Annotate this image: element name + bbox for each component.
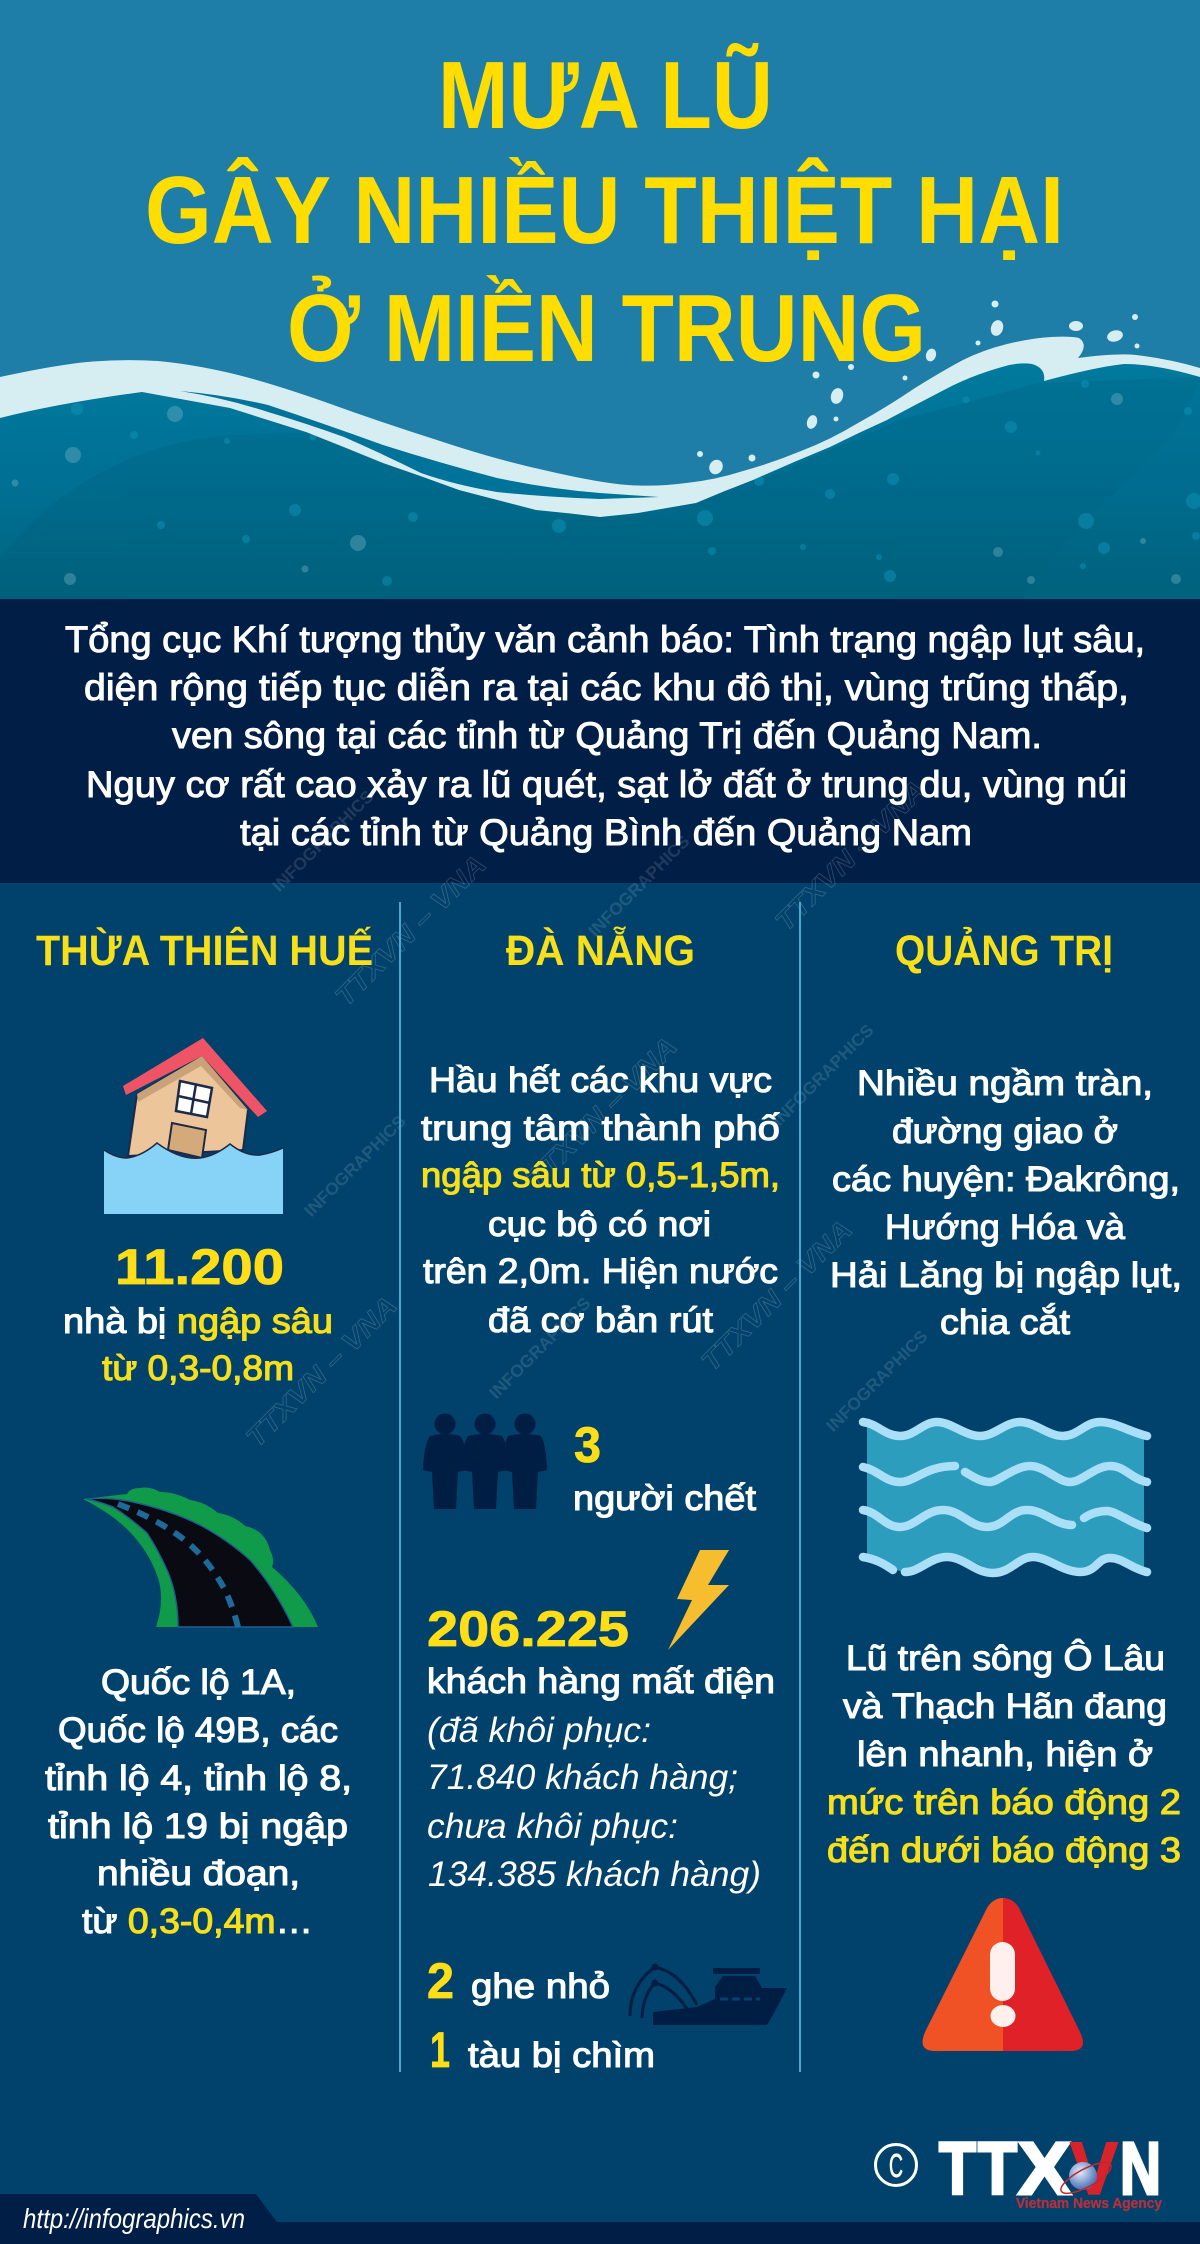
- copyright mark: [876, 2144, 916, 2186]
- panel: main background: [0, 883, 1200, 2244]
- title: Ở MIỀN TRUNG: [287, 274, 926, 382]
- stat: 3 deaths: 3: [574, 1417, 601, 1473]
- intro text: tại các tỉnh từ Quảng Bình đến Quảng Nam: [240, 812, 972, 853]
- watermarks: INFOGRAPHICS: [769, 1021, 878, 1130]
- spray droplets: [697, 300, 1140, 477]
- intro text: Tổng cục Khí tượng thủy văn cảnh báo: Tình trạng ngập lụt sâu,: [65, 619, 1145, 660]
- Quang Tri description: Nhiều ngầm tràn,: [857, 1064, 1153, 1103]
- heading: Quảng Trị: QUẢNG TRỊ: [895, 926, 1113, 975]
- stat: 11.200 houses: 11.200: [115, 1239, 284, 1295]
- river flood text: và Thạch Hãn đang: [843, 1687, 1167, 1726]
- stat: power outage: (đã khôi phục:: [427, 1711, 651, 1750]
- river flood text: đến dưới báo động 3: [827, 1831, 1181, 1870]
- watermarks: INFOGRAPHICS: [585, 832, 694, 941]
- watermarks: TTXVN – VNA: [240, 1290, 403, 1453]
- panel: Thừa Thiên Huế: [36, 926, 373, 1941]
- watermarks: INFOGRAPHICS: [823, 1327, 932, 1436]
- Da Nang description: cục bộ có nơi: [488, 1205, 711, 1244]
- logo: TTXVN: V: [1070, 2127, 1118, 2210]
- stat: 11.200 houses: nhà bị ngập sâu: [63, 1302, 333, 1341]
- icon: three people: [423, 1414, 547, 1509]
- stat: 11.200 houses: [63, 1239, 333, 1388]
- roads text: Quốc lộ 49B, các: [58, 1711, 338, 1750]
- watermarks: INFOGRAPHICS: [486, 1294, 595, 1403]
- river flood text: lên nhanh, hiện ở: [857, 1735, 1153, 1774]
- title: MƯA LŨ: [438, 42, 773, 149]
- Da Nang description: trên 2,0m. Hiện nước: [423, 1252, 778, 1291]
- roads text: tỉnh lộ 4, tỉnh lộ 8,: [45, 1759, 352, 1798]
- heading: Thừa Thiên Huế: THỪA THIÊN HUẾ: [36, 926, 373, 975]
- copyright mark: C: [889, 2147, 903, 2184]
- roads text: Quốc lộ 1A,: [101, 1663, 296, 1702]
- stat: 11.200 houses: từ 0,3-0,8m: [102, 1349, 294, 1388]
- stat: power outage: khách hàng mất điện: [427, 1662, 775, 1701]
- logo: TTXVN: T: [939, 2127, 976, 2210]
- intro text: ven sông tại các tỉnh từ Quảng Trị đến Quảng Nam.: [172, 715, 1042, 756]
- sea body: [0, 337, 1200, 600]
- panel: Quảng Trị: [827, 926, 1182, 2051]
- intro text: [65, 619, 1145, 853]
- stat: power outage: [427, 1601, 775, 1894]
- stat: boats sunk: ghe nhỏ: [471, 1967, 610, 2006]
- river flood text: mức trên báo động 2: [827, 1783, 1181, 1822]
- icon: flooded house: [104, 1038, 283, 1214]
- river flood text: [827, 1639, 1181, 1870]
- stat: power outage: chưa khôi phục:: [427, 1807, 678, 1846]
- Da Nang description: [421, 1061, 780, 1340]
- heading: Đà Nẵng: ĐÀ NẴNG: [506, 927, 695, 975]
- logo: TTXVN: Vietnam News Agency: [1016, 2195, 1163, 2212]
- Quang Tri description: Hải Lăng bị ngập lụt,: [830, 1256, 1182, 1295]
- foam inner slit: [180, 391, 659, 499]
- Da Nang description: Hầu hết các khu vực: [429, 1061, 772, 1100]
- icon: warning triangle: [923, 1898, 1083, 2051]
- Da Nang description: đã cơ bản rút: [488, 1301, 713, 1340]
- footer tab: [0, 2194, 277, 2244]
- stat: 3 deaths: người chết: [573, 1479, 756, 1518]
- stat: boats sunk: [427, 1953, 655, 2078]
- intro text: diện rộng tiếp tục diễn ra tại các khu đô thị, vùng trũng thấp,: [84, 667, 1129, 708]
- Quang Tri description: Hướng Hóa và: [885, 1208, 1126, 1247]
- Da Nang description: trung tâm thành phố: [421, 1109, 780, 1148]
- watermarks: TTXVN – VNA: [329, 849, 492, 1012]
- panel: Đà Nẵng: [421, 927, 787, 2078]
- sky background: [0, 0, 1200, 600]
- watermarks: [240, 774, 932, 1453]
- Da Nang description: ngập sâu từ 0,5-1,5m,: [421, 1156, 780, 1195]
- roads text: tỉnh lộ 19 bị ngập: [48, 1807, 348, 1846]
- stat: boats sunk: 2: [427, 1953, 454, 2009]
- stat: power outage: 134.385 khách hàng): [428, 1855, 761, 1894]
- watermarks: INFOGRAPHICS: [301, 1112, 410, 1221]
- title: [145, 42, 1064, 382]
- Quang Tri description: các huyện: Đakrông,: [832, 1160, 1180, 1199]
- watermarks: TTXVN – VNA: [769, 774, 932, 937]
- logo: TTXVN: X: [1018, 2127, 1071, 2210]
- roads text: [45, 1663, 352, 1941]
- icon: river waves: [863, 1422, 1147, 1573]
- icon: lightning bolt: [668, 1550, 729, 1650]
- logo: TTXVN: N: [1120, 2127, 1161, 2210]
- darker wave layers: [0, 377, 1200, 600]
- icon: road: [83, 1488, 318, 1627]
- stat: power outage: 71.840 khách hàng;: [427, 1758, 738, 1797]
- watermarks: TTXVN – VNA: [695, 1214, 858, 1377]
- logo: TTXVN: T: [978, 2127, 1017, 2210]
- source url: http://infographics.vn: [23, 2203, 245, 2234]
- watermarks: INFOGRAPHICS: [269, 787, 378, 896]
- stat: boats sunk: tàu bị chìm: [468, 2036, 655, 2075]
- Quang Tri description: [830, 1064, 1182, 1342]
- roads text: từ 0,3-0,4m …: [82, 1902, 313, 1941]
- wave foam: [0, 337, 1200, 517]
- river flood text: Lũ trên sông Ô Lâu: [846, 1639, 1165, 1678]
- stat: power outage: 206.225: [427, 1601, 629, 1657]
- watermarks: TTXVN – VNA: [520, 1031, 683, 1194]
- Quang Tri description: đường giao ở: [892, 1112, 1118, 1151]
- title: GÂY NHIỀU THIỆT HẠI: [145, 156, 1064, 264]
- intro text: Nguy cơ rất cao xảy ra lũ quét, sạt lở đất ở trung du, vùng núi: [86, 764, 1127, 805]
- panel: intro band: [0, 599, 1200, 883]
- roads text: nhiều đoạn,: [97, 1854, 300, 1893]
- Quang Tri description: chia cắt: [940, 1303, 1070, 1342]
- panel: header with sea wave: [0, 0, 1200, 600]
- icon: sinking boat: [630, 1964, 787, 2025]
- underwater bubbles: [71, 380, 1200, 586]
- stat: 3 deaths: [573, 1417, 756, 1518]
- logo: TTXVN: [939, 2127, 1163, 2212]
- stat: boats sunk: 1: [430, 2022, 450, 2078]
- footer band: [0, 2194, 1200, 2244]
